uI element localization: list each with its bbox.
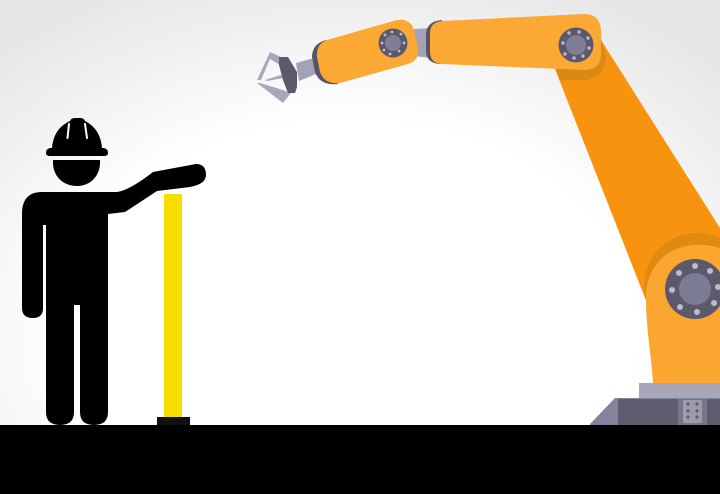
top arm hub: [558, 28, 594, 62]
robot base: [590, 383, 720, 425]
icon: hard hat: [46, 118, 108, 156]
forearm hub: [378, 28, 408, 58]
top arm shadow: [555, 38, 606, 80]
yellow safety pole: [157, 194, 190, 425]
lower body: [646, 245, 720, 383]
base hub: [665, 259, 720, 319]
body with raised arm: [22, 164, 206, 425]
gripper claw: [257, 52, 297, 103]
forearm segment: [317, 20, 418, 83]
lower body shadow: [644, 233, 720, 303]
robot arm: [257, 14, 720, 425]
forearm dark end: [312, 40, 338, 84]
ground: [0, 425, 720, 494]
worker figure: [22, 118, 206, 425]
upper arm segment: [553, 40, 720, 303]
top arm segment: [430, 14, 601, 70]
top arm dark end: [426, 20, 442, 64]
elbow connector: [414, 28, 432, 58]
wrist connector: [296, 58, 316, 81]
head: [53, 160, 100, 186]
